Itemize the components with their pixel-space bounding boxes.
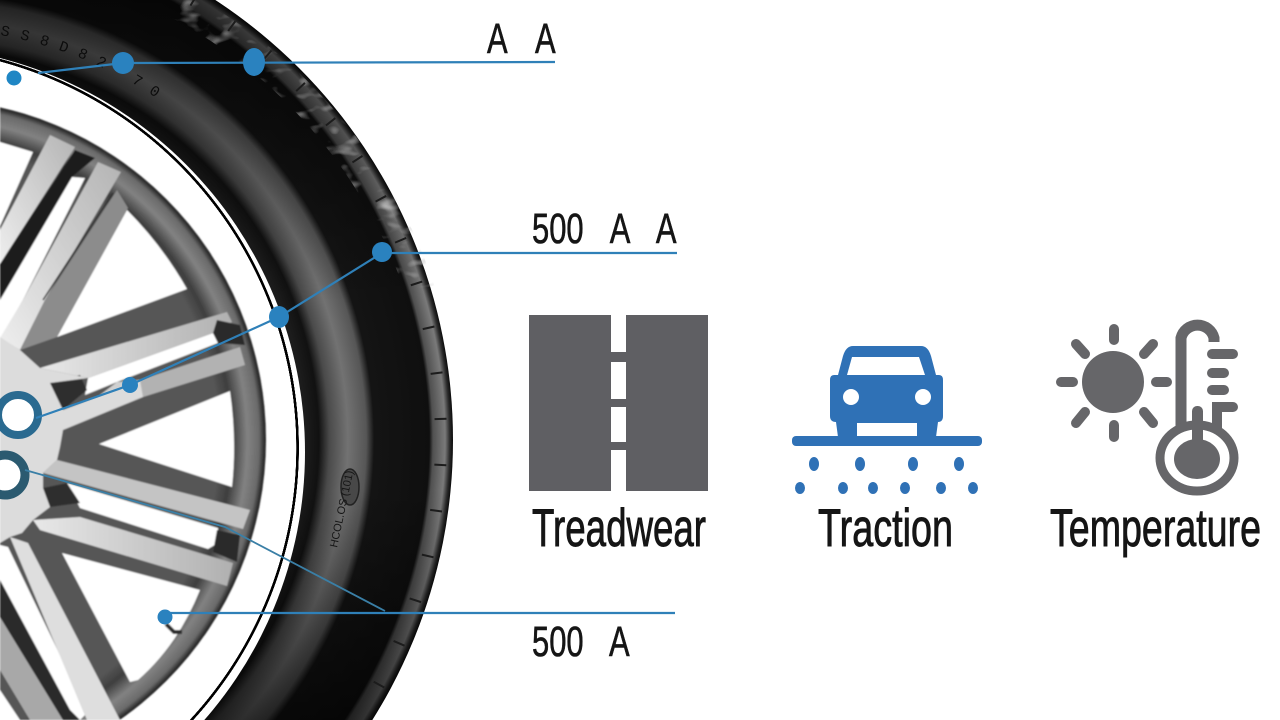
icon: traction car on wet road — [792, 346, 982, 494]
thermometer — [1160, 325, 1234, 491]
callout: middle label line — [36, 242, 677, 418]
wheel barrel — [0, 90, 280, 720]
hub bolt holes — [0, 395, 38, 495]
icon: treadwear road — [529, 315, 708, 491]
label: top grade: A — [487, 14, 508, 62]
sidewall lettering — [1, 26, 360, 549]
label: middle grade: A — [610, 204, 630, 252]
sun — [1061, 329, 1167, 437]
label: bottom grade: A — [609, 617, 630, 665]
label: middle grade: A — [656, 204, 676, 252]
icon: temperature sun and thermometer — [1061, 325, 1234, 491]
callout: top label line — [6, 48, 555, 86]
sidewall lettering: SS8D82 70 — [1, 26, 160, 96]
label: bottom grade: 500 — [532, 617, 584, 665]
white rim band — [0, 58, 305, 720]
heading: traction: Traction — [818, 499, 953, 558]
tire — [0, 0, 460, 720]
tire and wheel photo — [0, 0, 453, 720]
alloy wheel — [0, 90, 280, 720]
wheel openings — [0, 142, 234, 720]
label: middle grade: 500 — [532, 204, 584, 252]
valve stem — [166, 624, 182, 632]
label: top grade: A — [535, 14, 556, 62]
hub face — [0, 337, 143, 543]
heading: treadwear: Treadwear — [532, 499, 706, 558]
spokes — [0, 135, 250, 720]
callout: bottom label lines — [25, 470, 675, 624]
sidewall lettering: HCOL.OS (101) — [328, 470, 356, 549]
